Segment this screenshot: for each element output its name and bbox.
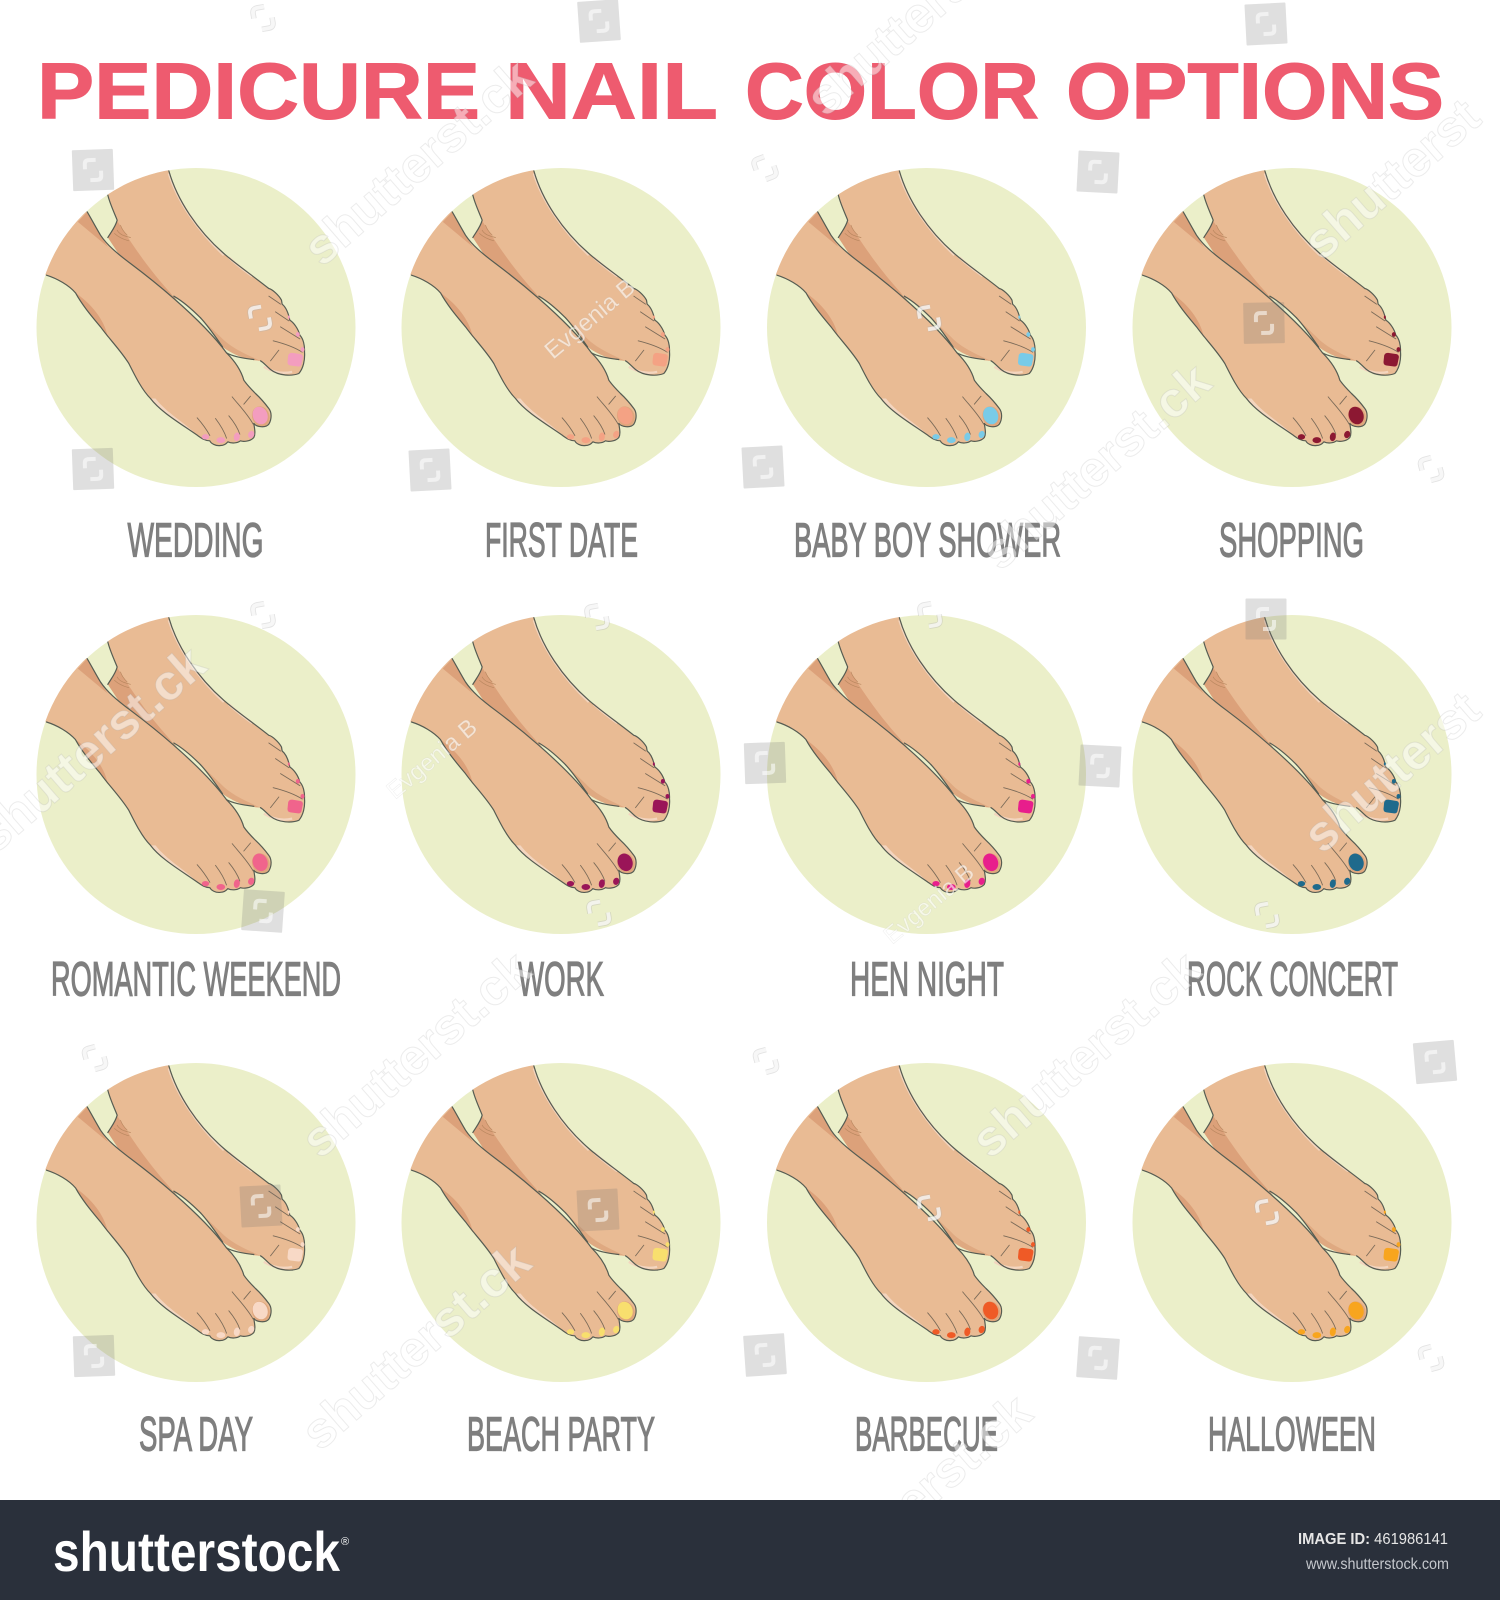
footer registered mark: ®: [341, 1536, 349, 1548]
footer url: www.shutterstock.com: [1305, 1556, 1449, 1573]
panel: spa day: [34, 1059, 356, 1462]
watermark: stock image overlay: shutterst: [1292, 87, 1491, 270]
panel: hen night: HEN NIGHT: [850, 954, 1004, 1006]
panel: romantic weekend: ROMANTIC WEEKEND: [51, 954, 341, 1006]
title: NAIL: [505, 46, 718, 136]
panel: barbecue: [764, 1059, 1086, 1462]
panel: baby boy shower: [764, 164, 1086, 568]
footer logo: shutterstock: [53, 1520, 341, 1583]
panel: halloween: [1130, 1059, 1452, 1462]
watermark: stock image overlay: shutterst: [1292, 680, 1491, 863]
title: [37, 46, 1444, 136]
panel: first date: [399, 164, 720, 568]
panel: beach party: [399, 1059, 720, 1462]
footer bar: [0, 1500, 1500, 1600]
panel: shopping: [1130, 164, 1452, 568]
panel: romantic weekend: [34, 610, 356, 1006]
panel: barbecue: BARBECUE: [855, 1408, 998, 1462]
panel: hen night: [764, 610, 1086, 1006]
watermark: stock image overlay: Evgenia B: [382, 714, 483, 805]
watermark: stock image overlay: shutterst.ck: [290, 1232, 541, 1460]
panel: first date: FIRST DATE: [485, 514, 638, 568]
title: PEDICURE: [37, 46, 480, 136]
panel: work: [399, 610, 720, 1006]
watermark: stock image overlay: shutterst.ck: [290, 940, 541, 1168]
watermark: stock image overlay: Evgenia B: [879, 859, 980, 950]
panel: baby boy shower: BABY BOY SHOWER: [794, 514, 1061, 568]
panel: wedding: WEDDING: [128, 514, 264, 568]
title: OPTIONS: [1066, 46, 1444, 136]
watermark: stock image overlay: shutterst.ck: [970, 352, 1221, 580]
panel: work: WORK: [518, 954, 604, 1006]
panel: rock concert: [1130, 610, 1452, 1006]
watermark: stock image overlay: shutterst.ck: [960, 940, 1211, 1168]
footer image id: IMAGE ID: 461986141: [1298, 1531, 1448, 1548]
panel: beach party: BEACH PARTY: [467, 1408, 655, 1462]
watermark: stock image overlay: Evgenia B: [540, 274, 641, 365]
watermark: stock image overlay: shutterst.ck: [292, 48, 543, 276]
title: COLOR: [745, 46, 1039, 136]
panel: shopping: SHOPPING: [1219, 514, 1364, 568]
panel: wedding: [34, 164, 356, 568]
panel: spa day: SPA DAY: [139, 1408, 253, 1462]
